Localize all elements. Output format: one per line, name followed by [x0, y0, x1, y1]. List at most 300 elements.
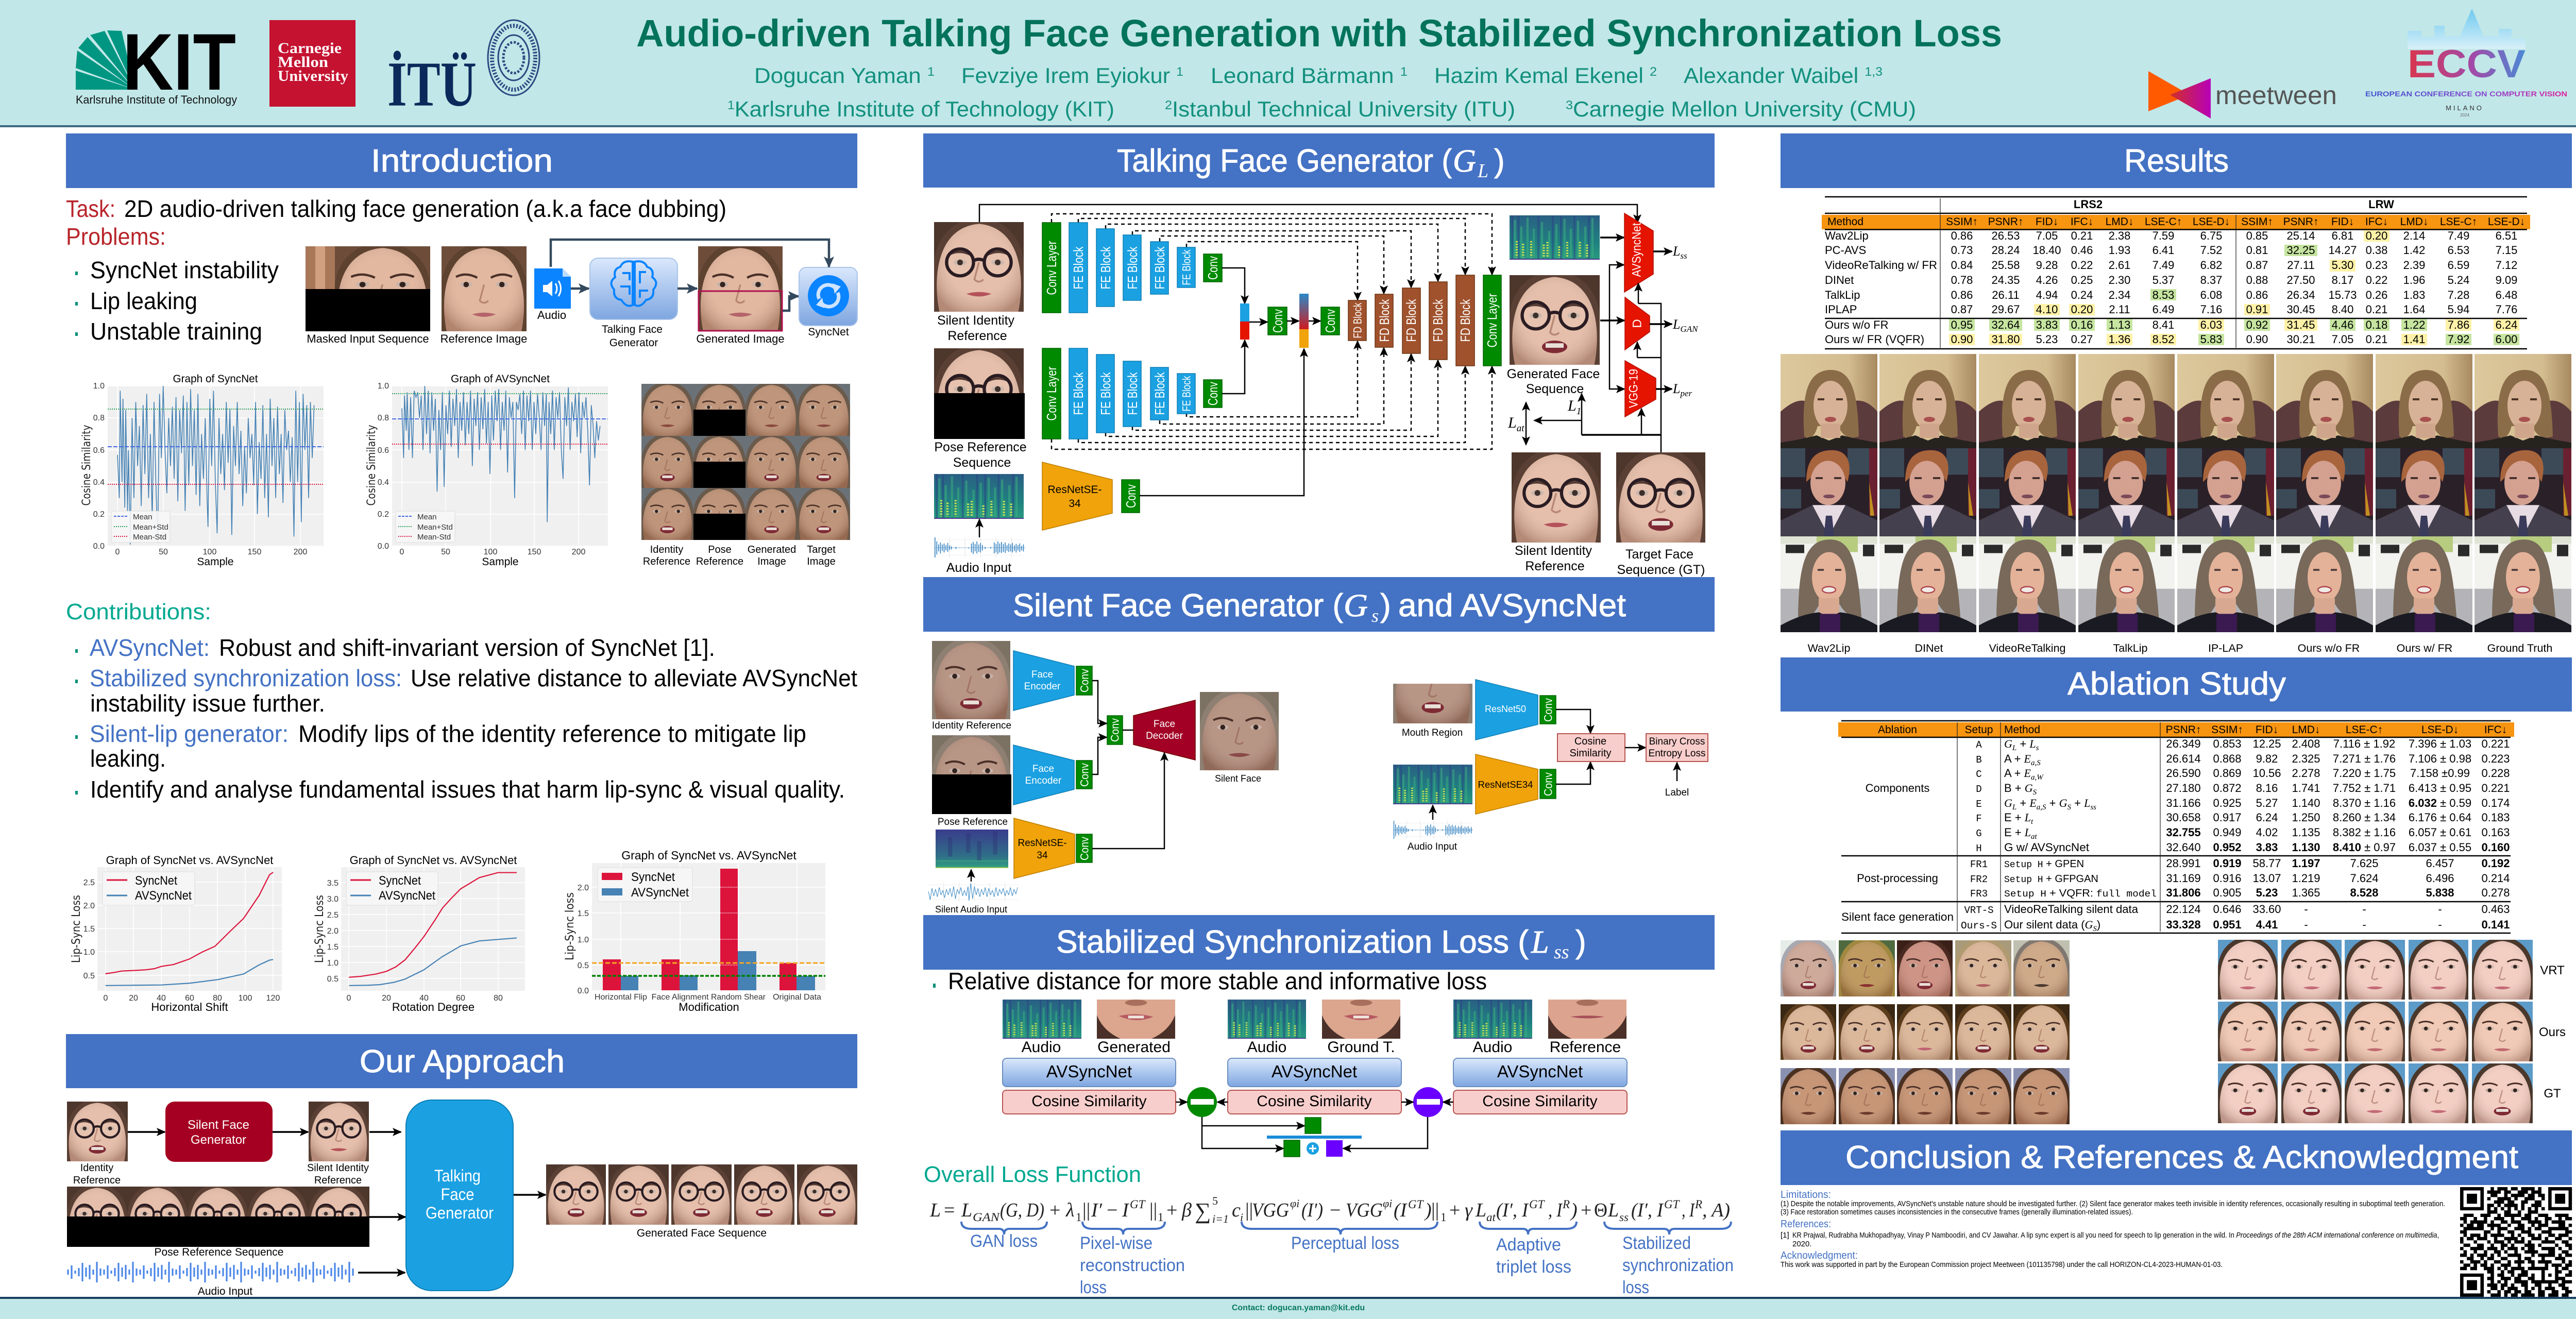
- chart: graph of AVSyncNet: 50: [441, 548, 450, 556]
- heading: Introduction: [66, 133, 857, 188]
- diagram: silent face generator: Identity Reference: [932, 720, 1011, 731]
- table: ablation results: 0.192: [2481, 857, 2510, 870]
- table: quantitative results: 7.86: [2448, 318, 2469, 331]
- braces and loss labels: Adaptive: [1496, 1235, 1561, 1255]
- chart: graph of SyncNet: 0.2: [93, 510, 105, 519]
- table: ablation results: 9.82: [2256, 752, 2278, 765]
- arrow: [677, 288, 697, 290]
- table: quantitative results: 6.48: [2496, 289, 2517, 301]
- image grid: qualitative comparison: IP-LAP: [2208, 642, 2243, 654]
- table: quantitative results: LMD↓: [2106, 216, 2133, 228]
- panel: talking face generator: [923, 133, 1715, 577]
- diagram: relative distance: Audio: [1022, 1039, 1061, 1056]
- table: ablation results: 5.838: [2426, 886, 2454, 899]
- table: ablation results: SSIM↑: [2211, 724, 2243, 736]
- equation: overall loss: ||: [1431, 1199, 1439, 1221]
- encoder: top: [1042, 223, 1222, 313]
- table: quantitative results: 6.81: [2332, 229, 2353, 242]
- table: ablation results: -: [2362, 918, 2366, 931]
- equation: overall loss: VGG: [1346, 1199, 1383, 1221]
- table: ablation results: Silent face generation: [1841, 910, 1954, 923]
- braces and loss labels: reconstruction: [1080, 1256, 1185, 1275]
- outputs and losses: ss: [1680, 251, 1687, 261]
- table: quantitative results: 5.30: [2332, 259, 2353, 272]
- table: ablation results: 7.116 ± 1.92: [2333, 737, 2395, 750]
- table: ablation results: E + L: [2004, 826, 2031, 839]
- chart: horizontal shift: Graph of SyncNet vs. AVSyncNet: [106, 854, 273, 867]
- title: Audio-driven Talking Face Generation with Stabilized Synchronization Loss: [636, 12, 2002, 55]
- contributions list: Modify lips of the identity reference to mitigate lip: [298, 720, 806, 747]
- audio encoder: Conv: [1123, 484, 1139, 508]
- image grid: identity, pose, generated, target: Identity: [650, 544, 683, 555]
- table: quantitative results: 8.37: [2200, 274, 2222, 286]
- table: ablation results: E: [1976, 799, 1982, 810]
- table: quantitative results: 5.23: [2036, 333, 2058, 346]
- image grid: silent face samples, right: GT: [2544, 1087, 2561, 1101]
- arrow: [783, 296, 799, 311]
- chart: modification bars: AVSyncNet: [631, 886, 689, 900]
- chart: horizontal shift: AVSyncNet: [135, 889, 192, 903]
- table: ablation results: Components: [1866, 782, 1929, 794]
- contributions list: instability issue further.: [90, 690, 325, 717]
- audio waveform: [68, 1262, 353, 1297]
- table: ablation results: 0.951: [2213, 918, 2242, 931]
- diagram: relative distance: AVSyncNet: [1046, 1062, 1132, 1081]
- equation: overall loss: L: [961, 1199, 972, 1221]
- table: quantitative results: 30.45: [2286, 303, 2315, 316]
- table: ablation results: E + L: [2004, 811, 2031, 824]
- chart: horizontal shift: 0.5: [83, 972, 95, 980]
- chart: graph of SyncNet: 0.8: [93, 414, 105, 422]
- audio encoder: [1042, 349, 1304, 530]
- table: quantitative results: 27.50: [2286, 274, 2315, 286]
- panel: silent face generator and AVSyncNet: [923, 577, 1715, 915]
- table: ablation results: Setup: [1965, 724, 1993, 736]
- chart: rotation degree: 1.5: [327, 943, 338, 952]
- bullet text: Relative distance for more stable and informative loss: [948, 968, 1487, 994]
- table: quantitative results: 0.78: [1951, 274, 1973, 286]
- table: quantitative results: 6.03: [2200, 318, 2222, 331]
- logo: ECCV: [2365, 9, 2567, 117]
- equation: overall loss: (I: [1394, 1199, 1408, 1221]
- table: ablation results: a,S: [2031, 759, 2041, 767]
- table: quantitative results: 9.28: [2036, 259, 2058, 272]
- affiliations: Istanbul Technical University (ITU): [1172, 97, 1515, 121]
- table: quantitative results: 7.92: [2448, 333, 2469, 346]
- task line: Task:: [66, 195, 115, 222]
- equation: overall loss: ||: [1149, 1199, 1157, 1221]
- table: quantitative results: FID↓: [2036, 216, 2058, 228]
- table: ablation results: S: [2033, 788, 2037, 797]
- decoder: [1348, 275, 1501, 366]
- encoder: bottom: FE Block: [1152, 372, 1167, 415]
- chart: horizontal shift: 1.5: [83, 925, 95, 934]
- table: ablation results: +: [2071, 797, 2084, 809]
- chart: modification bars: Original Data: [773, 993, 821, 1002]
- arrow: [369, 1131, 401, 1133]
- equation: overall loss: R: [1562, 1198, 1570, 1211]
- limitations text: Limitations:: [1781, 1189, 1831, 1200]
- equation: overall loss: GT: [1130, 1198, 1146, 1211]
- table: quantitative results: VideoReTalking w/ FR: [1825, 259, 1937, 272]
- outputs and losses: VGG-19: [1627, 369, 1640, 408]
- outputs and losses: L: [1673, 244, 1680, 259]
- table: ablation results: [1838, 721, 2514, 933]
- chart: graph of SyncNet: Graph of SyncNet: [173, 373, 258, 385]
- affiliations: [727, 97, 1916, 121]
- image grid: qualitative comparison: TalkLip: [2113, 642, 2147, 654]
- chart: horizontal shift: 1.0: [83, 948, 95, 957]
- inputs: Pose Reference: [934, 440, 1027, 454]
- diagram: AVSyncNet: ResNet50: [1485, 704, 1526, 714]
- chart: horizontal shift: 0: [104, 994, 108, 1003]
- table: ablation results: 7.271 ± 1.76: [2333, 752, 2396, 765]
- diagram: silent face generator: Face: [1032, 764, 1054, 774]
- encoder: top: FE Block: [1152, 246, 1167, 290]
- heading: Talking Face Generator: [923, 133, 1715, 188]
- table: quantitative results: 5.24: [2448, 274, 2469, 286]
- table: quantitative results: 8.17: [2332, 274, 2353, 286]
- equation: overall loss: +: [1581, 1199, 1591, 1221]
- equation: overall loss: c: [1232, 1199, 1241, 1221]
- table: ablation results: 0.916: [2213, 872, 2242, 885]
- table: quantitative results: 6.75: [2200, 229, 2222, 242]
- inputs: Audio Input: [946, 561, 1011, 575]
- table: ablation results: 7.624: [2350, 872, 2379, 885]
- table: ablation results: 32.640: [2166, 841, 2201, 854]
- contributions list: leaking.: [90, 745, 166, 772]
- heading: stabilized synchronization loss: ): [1575, 924, 1586, 960]
- chart: rotation degree: SyncNet: [379, 874, 421, 888]
- table: quantitative results: 31.45: [2286, 318, 2315, 331]
- skip connections: [979, 205, 1637, 449]
- equation: overall loss: (I′, I: [1631, 1199, 1664, 1221]
- image: silent identity reference: Reference: [314, 1175, 362, 1186]
- table: quantitative results: Method: [1827, 216, 1863, 228]
- table: ablation results: 0.853: [2213, 737, 2242, 750]
- heading: ablation study: [1781, 657, 2572, 712]
- table: quantitative results: TalkLip: [1825, 289, 1860, 301]
- chart: rotation degree: 0.5: [327, 975, 338, 984]
- table: quantitative results: LSE-C↑: [2440, 216, 2477, 228]
- table: ablation results: 0.952: [2213, 841, 2242, 854]
- table: quantitative results: 25.58: [1991, 259, 2020, 272]
- chart: graph of SyncNet: 100: [203, 548, 216, 556]
- table: quantitative results: 0.23: [2366, 259, 2387, 272]
- table: ablation results: 0.917: [2213, 811, 2242, 824]
- table: ablation results: 0.925: [2213, 797, 2242, 809]
- heading: Our Approach: [66, 1034, 857, 1088]
- table: ablation results: S: [2093, 925, 2097, 933]
- table: quantitative results: 0.86: [1951, 289, 1973, 301]
- footer band: [0, 1297, 2576, 1319]
- table: ablation results: IFC↓: [2484, 724, 2507, 736]
- image: reference image: Reference Image: [440, 332, 527, 345]
- equation: overall loss: ||: [1082, 1199, 1090, 1221]
- diagram: silent face generator: Conv: [1109, 718, 1121, 742]
- equation: overall loss: L: [1475, 1199, 1486, 1221]
- diagram: relative distance: Cosine Similarity: [1482, 1093, 1598, 1110]
- equation: overall loss: ss: [1619, 1211, 1629, 1224]
- diagram: AVSyncNet: Mouth Region: [1402, 728, 1463, 738]
- chart: horizontal shift: SyncNet: [135, 874, 177, 888]
- box: SyncNet: SyncNet: [808, 326, 849, 338]
- chart: horizontal shift: 2.5: [83, 878, 95, 887]
- table: ablation results: 22.124: [2166, 903, 2201, 916]
- authors: 1: [1400, 65, 1408, 79]
- contributions list: Stabilized synchronization loss:: [90, 665, 402, 691]
- logo: KIT: KIT: [123, 18, 236, 107]
- table: ablation results: at: [2031, 833, 2037, 841]
- equation: overall loss: 1: [1440, 1211, 1447, 1224]
- table: quantitative results: 28.24: [1991, 244, 2020, 257]
- heading: silent face generator: G: [1344, 588, 1368, 623]
- table: quantitative results: 0.46: [2071, 244, 2093, 257]
- table: quantitative results: 0.95: [1951, 318, 1973, 331]
- logo: meetween: [2148, 71, 2337, 119]
- equation: overall loss: ||: [1245, 1199, 1253, 1221]
- table: quantitative results: 25.14: [2286, 229, 2315, 242]
- table: ablation results: FR1: [1970, 859, 1988, 870]
- outputs and losses: D: [1630, 319, 1645, 328]
- table: quantitative results: [1822, 197, 2530, 349]
- table: ablation results: -: [2304, 918, 2308, 931]
- image grid: identity, pose, generated, target: Pose: [708, 544, 732, 555]
- outputs and losses: [1507, 213, 1705, 577]
- chart: graph of SyncNet: 0.4: [93, 478, 105, 487]
- table: quantitative results: 0.27: [2071, 333, 2093, 346]
- affiliations: 2: [1165, 98, 1172, 112]
- image grid: identity, pose, generated, target: Reference: [643, 556, 690, 567]
- equation: overall loss: (G, D): [1000, 1199, 1044, 1221]
- chart: horizontal shift: 80: [213, 994, 222, 1003]
- table: quantitative results: 7.52: [2200, 244, 2222, 257]
- logo: ECCV: EUROPEAN CONFERENCE ON COMPUTER VISION: [2365, 90, 2567, 98]
- table: ablation results: E: [2029, 797, 2046, 811]
- contributions: [66, 599, 857, 803]
- equation: overall loss: φi: [1290, 1197, 1299, 1210]
- chart: graph of SyncNet: 150: [248, 548, 261, 556]
- encoder: bottom: Conv Layer: [1044, 366, 1059, 420]
- image: identity reference: Identity: [80, 1162, 113, 1174]
- table: ablation results: S: [2067, 803, 2071, 811]
- diagram: relative distance: Ground T.: [1327, 1039, 1395, 1056]
- table: quantitative results: 2.34: [2109, 289, 2130, 301]
- table: quantitative results: LMD↓: [2400, 216, 2428, 228]
- header band: [0, 0, 2576, 127]
- encoder: top: FE Block: [1098, 246, 1113, 290]
- table: ablation results: A + E: [2004, 752, 2031, 765]
- table: quantitative results: 1.41: [2403, 333, 2425, 346]
- chart: graph of AVSyncNet: Mean+Std: [417, 523, 453, 532]
- equation: overall loss: 5: [1212, 1194, 1218, 1207]
- chart: graph of AVSyncNet: 200: [572, 548, 585, 556]
- table: ablation results: G: [2004, 737, 2016, 752]
- logo: ITU: İTÜ: [387, 49, 477, 120]
- outputs and losses: AVSyncNet: [1630, 223, 1643, 277]
- chart: graph of SyncNet: 0.0: [93, 542, 105, 551]
- logo: Carnegie Mellon University: Mellon: [278, 54, 328, 71]
- chart: rotation degree: 0: [347, 994, 351, 1003]
- logo: ITU: [387, 20, 539, 120]
- table: ablation results: 2.278: [2292, 767, 2320, 780]
- table: ablation results: 8.16: [2256, 782, 2278, 794]
- table: ablation results: 6.057 ± 0.61: [2409, 826, 2471, 839]
- table: ablation results: 7.752 ± 1.71: [2333, 782, 2396, 794]
- table: quantitative results: 0.90: [2246, 333, 2268, 346]
- table: quantitative results: IPLAP: [1825, 303, 1857, 316]
- diagram: relative distance: Audio: [1247, 1039, 1286, 1056]
- table: quantitative results: 0.20: [2366, 229, 2387, 242]
- equation: overall loss: , A): [1702, 1199, 1730, 1221]
- image grid: silent face samples, right: VRT: [2540, 963, 2565, 977]
- logo: ECCV: ECCV: [2408, 42, 2526, 86]
- table: ablation results: FR2: [1970, 874, 1988, 885]
- table: ablation results: 8.260 ± 1.34: [2333, 811, 2396, 824]
- arrow: [571, 288, 589, 290]
- chart: graph of AVSyncNet: 150: [528, 548, 541, 556]
- encoder: bottom: Conv: [1205, 382, 1221, 405]
- limitations text: [1781, 1189, 2445, 1216]
- table: ablation results: 0.869: [2213, 767, 2242, 780]
- chart: graph of SyncNet: Sample: [197, 556, 234, 568]
- table: ablation results: Method: [2004, 724, 2040, 736]
- table: ablation results: 6.496: [2426, 872, 2454, 885]
- table: ablation results: D: [1976, 784, 1982, 795]
- table: quantitative results: 0.22: [2071, 259, 2093, 272]
- table: quantitative results: 4.10: [2036, 303, 2058, 316]
- chart: modification bars: Modification: [679, 1001, 739, 1013]
- table: quantitative results: 7.05: [2036, 229, 2058, 242]
- chart: modification bars: Random Shear: [711, 993, 766, 1002]
- image: silent identity reference: Silent Identity: [307, 1162, 369, 1174]
- table: quantitative results: 8.40: [2332, 303, 2353, 316]
- equation: overall loss: VGG: [1252, 1199, 1289, 1221]
- table: quantitative results: 1.13: [2109, 318, 2130, 331]
- outputs and losses: Sequence: [1526, 382, 1584, 396]
- table: ablation results: L: [2029, 737, 2039, 752]
- heading: silent face generator: s: [1371, 605, 1379, 626]
- equation: overall loss: (I′): [1301, 1199, 1323, 1221]
- equation: overall loss: , I: [1682, 1199, 1696, 1221]
- image grid: silent face samples, right: [2218, 937, 2566, 1123]
- table: ablation results: 10.56: [2252, 767, 2281, 780]
- outputs and losses: Reference: [1525, 559, 1585, 573]
- table: ablation results: 7.220 ± 1.75: [2333, 767, 2396, 780]
- table: quantitative results: 0.87: [1951, 303, 1973, 316]
- table: ablation results: 6.413 ± 0.95: [2409, 782, 2471, 794]
- table: quantitative results: 6.53: [2448, 244, 2469, 257]
- table: ablation results: 8.410 ± 0.97: [2333, 841, 2396, 854]
- table: quantitative results: 0.92: [2246, 318, 2268, 331]
- image: silent identity reference: [307, 1098, 369, 1186]
- heading: stabilized synchronization loss: Stabilized Synchronization Loss (: [1056, 924, 1529, 960]
- chart: modification bars: Horizontal Flip: [595, 993, 647, 1002]
- table: ablation results: A: [1976, 739, 1982, 751]
- table: quantitative results: LSE-C↑: [2145, 216, 2182, 228]
- box: talking face generator: Talking Face: [602, 324, 663, 335]
- box: silent face generator: Silent Face: [188, 1118, 249, 1132]
- table: quantitative results: 0.73: [1951, 244, 1973, 257]
- table: ablation results: 0.183: [2481, 811, 2510, 824]
- image grid: qualitative comparison: Ours w/ FR: [2397, 642, 2452, 654]
- table: quantitative results: 0.21: [2366, 333, 2387, 346]
- equation: overall loss: ): [1570, 1199, 1578, 1221]
- inputs: Sequence: [953, 455, 1011, 470]
- encoder: bottom: [1042, 348, 1222, 439]
- table: ablation results: 0.868: [2213, 752, 2242, 765]
- heading: Introduction: Introduction: [371, 143, 553, 179]
- table: quantitative results: 32.25: [2286, 244, 2315, 257]
- chart: horizontal shift: 120: [266, 994, 280, 1003]
- diagram: AVSyncNet: Binary Cross: [1649, 736, 1705, 747]
- table: quantitative results: 4.46: [2332, 318, 2353, 331]
- chart: horizontal shift: 40: [157, 994, 166, 1003]
- encoder: bottom: FE Block: [1125, 372, 1140, 415]
- diagram: silent face generator: Face: [1154, 719, 1175, 730]
- table: quantitative results: 6.24: [2496, 318, 2517, 331]
- equation: overall loss: GAN: [973, 1211, 1001, 1224]
- table: ablation results: 0.174: [2481, 797, 2510, 809]
- arrow: [358, 1272, 405, 1274]
- image grid: identity, pose, generated, target: Image: [757, 556, 786, 567]
- diagram: AVSyncNet: Cosine: [1574, 736, 1606, 747]
- table: ablation results: -: [2362, 903, 2366, 916]
- table: ablation results: 0.949: [2213, 826, 2242, 839]
- problems list: Unstable training: [90, 318, 262, 345]
- table: ablation results: 5.23: [2256, 886, 2278, 899]
- table: ablation results: 26.590: [2166, 767, 2201, 780]
- table: quantitative results: 0.16: [2071, 318, 2093, 331]
- chart: graph of SyncNet: 0: [115, 548, 120, 556]
- table: ablation results: -: [2304, 903, 2308, 916]
- problems list: [66, 223, 279, 345]
- table: ablation results: 0.160: [2481, 841, 2510, 854]
- table: ablation results: +: [2016, 797, 2029, 809]
- authors: 2: [1650, 65, 1657, 79]
- chart: rotation degree: AVSyncNet: [379, 889, 435, 903]
- table: ablation results: VideoReTalking silent data: [2004, 903, 2139, 916]
- references text: 2020.: [1792, 1240, 1812, 1248]
- table: ablation results: Ablation: [1878, 724, 1917, 736]
- box: talking face generator: [406, 1100, 513, 1291]
- chart: horizontal shift: Lip-Sync Loss: [70, 895, 83, 963]
- equation: overall loss: +: [1166, 1199, 1177, 1221]
- chart: horizontal shift: 60: [185, 994, 194, 1003]
- equation: overall loss: ∑: [1195, 1198, 1211, 1224]
- braces and loss labels: Pixel-wise: [1080, 1233, 1153, 1253]
- bottleneck: Conv: [1270, 309, 1285, 333]
- table: quantitative results: SSIM↑: [1946, 216, 1978, 228]
- table: quantitative results: 18.40: [2032, 244, 2061, 257]
- table: quantitative results: 6.00: [2496, 333, 2517, 346]
- table: quantitative results: 0.20: [2071, 303, 2093, 316]
- task line: 2D audio-driven talking face generation (a.k.a face dubbing): [124, 195, 726, 222]
- table: quantitative results: 1.64: [2403, 303, 2425, 316]
- panel: stabilized synchronization loss: [923, 915, 1734, 1297]
- table: ablation results: 28.991: [2166, 857, 2201, 870]
- table: quantitative results: 6.59: [2448, 259, 2469, 272]
- chart: rotation degree: Rotation Degree: [392, 1001, 474, 1013]
- diagram: silent face generator: 34: [1037, 850, 1048, 861]
- table: quantitative results: LRW: [2368, 198, 2394, 211]
- table: ablation results: C: [1976, 769, 1982, 780]
- arrow: [514, 1194, 546, 1196]
- references text: [1781, 1219, 2439, 1248]
- table: ablation results: Post-processing: [1857, 872, 1938, 885]
- equation: overall loss: γ: [1465, 1199, 1473, 1221]
- diagram: silent face generator: Conv: [1078, 669, 1091, 692]
